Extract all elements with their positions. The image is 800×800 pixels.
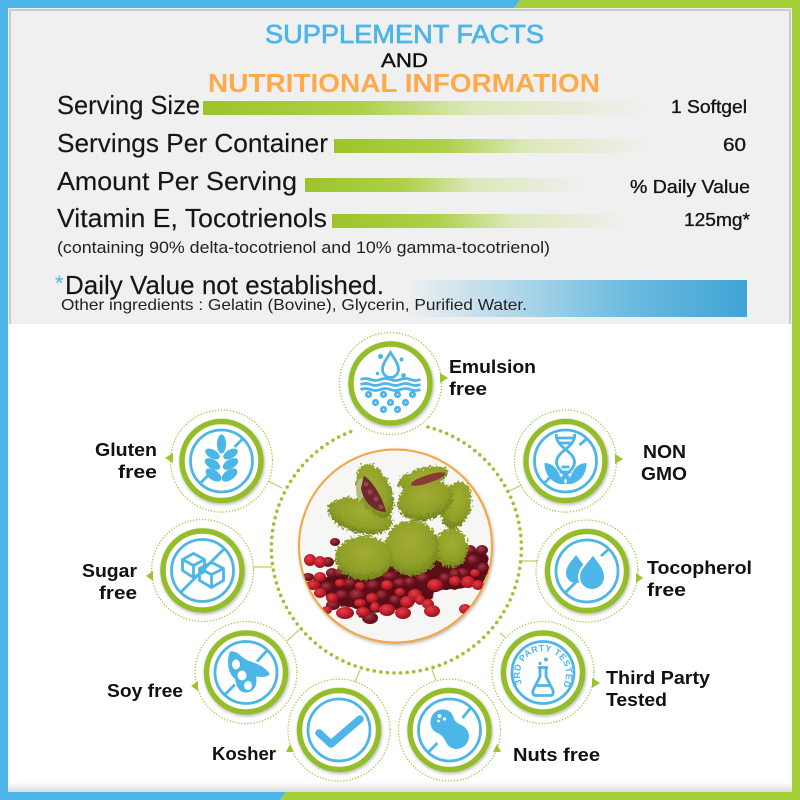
note: tocotrienol composition: (containing 90% delta-tocotrienol and 10% gamma-tocotrienol) — [57, 238, 550, 257]
label: nuts free: Nuts free — [513, 745, 600, 765]
badge: sugar free — [152, 520, 254, 622]
row: serving size: 1 Softgel — [671, 97, 747, 117]
label: emulsion free — [440, 357, 536, 399]
panel: supplement facts — [8, 8, 792, 324]
icon: DNA with leaf crossed out — [534, 430, 596, 492]
row: servings per container: Servings Per Container — [57, 128, 328, 158]
label: gluten free: Gluten — [95, 440, 157, 460]
title: SUPPLEMENT FACTS — [265, 19, 544, 49]
label: third party tested — [592, 668, 710, 710]
icon: sugar cubes crossed out — [172, 540, 234, 602]
icon: oil drops crossed out — [556, 540, 618, 602]
row: vitamin E — [57, 203, 750, 233]
label: tocopherol free — [636, 558, 752, 600]
label: sugar free: free — [99, 583, 137, 603]
connector lines — [253, 481, 538, 682]
label: gluten free — [95, 440, 173, 482]
pod seeds — [356, 470, 446, 512]
icon: water drop and emulsion — [360, 352, 420, 412]
label: emulsion free: Emulsion — [449, 357, 536, 377]
label: nuts free — [493, 744, 600, 765]
label: tocopherol free: Tocopherol — [647, 558, 752, 578]
icon: peanut crossed out — [418, 699, 480, 761]
label: third party tested: Tested — [606, 690, 667, 710]
label: emulsion free: free — [449, 379, 487, 399]
badge: kosher — [288, 679, 390, 781]
label: soy free: Soy free — [107, 681, 183, 701]
central photo: annatto pods and softgels — [299, 450, 492, 642]
daily value note — [55, 270, 527, 314]
blue gradient bar — [405, 280, 747, 317]
daily value note: * — [55, 271, 64, 296]
icon: check mark — [308, 699, 370, 761]
title: AND — [381, 51, 428, 72]
row: amount per serving: % Daily Value — [630, 177, 750, 197]
row: amount per serving — [57, 166, 750, 197]
row: servings per container: 60 — [723, 135, 746, 155]
icon: wheat crossed out — [190, 430, 252, 492]
row: amount per serving: Amount Per Serving — [57, 166, 297, 196]
label: sugar free — [82, 561, 153, 603]
label: non GMO: NON — [643, 442, 686, 462]
label: tocopherol free: free — [647, 580, 686, 600]
label: non GMO: GMO — [641, 464, 687, 484]
spiky pods — [324, 458, 477, 584]
row: serving size — [57, 90, 747, 120]
row: serving size: Serving Size — [57, 90, 200, 120]
row: vitamin E: Vitamin E, Tocotrienols — [57, 203, 327, 233]
row: vitamin E: 125mg* — [684, 210, 750, 230]
central dotted ring — [271, 427, 521, 673]
icon: soybean crossed out — [215, 642, 277, 704]
label: sugar free: Sugar — [82, 561, 137, 581]
title — [208, 19, 600, 98]
icon: flask seal: 3RD PARTY TESTED — [514, 644, 572, 688]
badge: emulsion free — [340, 332, 442, 434]
label: non GMO — [615, 442, 687, 484]
daily value note: Daily Value not established. — [65, 270, 384, 300]
badge: gluten free — [170, 410, 272, 512]
badge: nuts free — [398, 679, 500, 781]
badge: non GMO — [514, 410, 616, 512]
label: third party tested: Third Party — [606, 668, 710, 688]
badge: tocopherol free — [536, 520, 638, 622]
daily value note: Other ingredients : Gelatin (Bovine), Glycerin, Purified Water. — [61, 297, 527, 314]
row: servings per container — [57, 128, 746, 158]
label: kosher: Kosher — [212, 744, 276, 764]
title: NUTRITIONAL INFORMATION — [208, 68, 600, 98]
softgels — [302, 538, 489, 624]
badge: third party tested — [491, 620, 595, 724]
label: gluten free: free — [118, 462, 157, 482]
badge: soy free — [195, 622, 297, 724]
